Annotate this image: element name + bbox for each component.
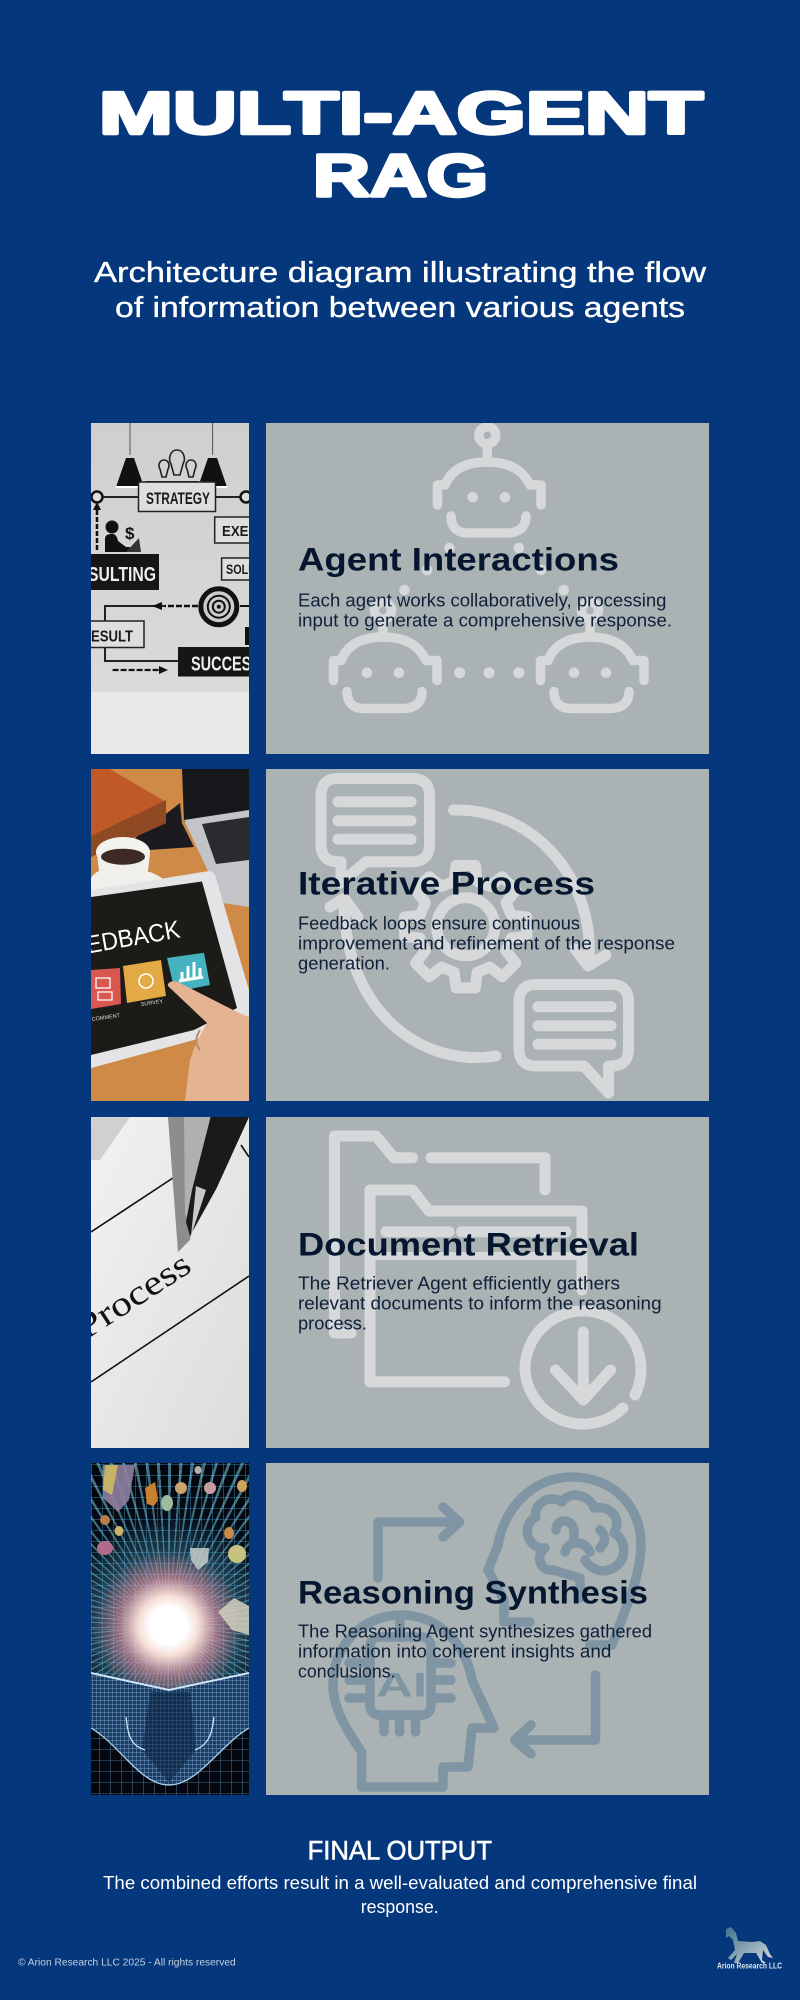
- photo: feedback tablet: COMMENT: [91, 1013, 121, 1023]
- row: iterative process: [69, 769, 709, 1101]
- photo: feedback tablet: [91, 769, 249, 1101]
- heading: final output: FINAL OUTPUT: [308, 1835, 492, 1865]
- text: document retrieval: [298, 1273, 662, 1333]
- text: document retrieval: process.: [298, 1313, 367, 1333]
- panel: agent interactions: [266, 423, 709, 754]
- logo: Arion Research horse: [717, 1927, 782, 1971]
- text: document retrieval: The Retriever Agent efficiently gathers: [298, 1273, 620, 1293]
- photo: strategy consulting wall: $: [125, 524, 135, 543]
- photo: process document and pen: [91, 1117, 249, 1448]
- text: final output description: response.: [361, 1896, 439, 1917]
- text: iterative process: generation.: [298, 953, 390, 973]
- text: agent interactions: Each agent works collaboratively, processing: [298, 591, 666, 611]
- text: agent interactions: [298, 591, 672, 631]
- row: document retrieval: [69, 1117, 709, 1448]
- photo: feedback tablet: EEDBACK: [69, 915, 182, 962]
- heading: agent interactions: Agent Interactions: [298, 542, 619, 578]
- text: final output description: [103, 1872, 697, 1917]
- text: document retrieval: relevant documents to inform the reasoning: [298, 1293, 662, 1313]
- icon: AI and human heads: [333, 1477, 641, 1787]
- icon: AI and human heads: AI: [376, 1667, 427, 1705]
- heading: iterative process: Iterative Process: [298, 865, 595, 901]
- photo: strategy consulting wall: EXEC: [222, 523, 258, 540]
- logo: Arion Research horse: Arion Research LLC: [717, 1962, 782, 1971]
- text: reasoning synthesis: conclusions.: [298, 1661, 396, 1681]
- text: iterative process: [298, 913, 675, 973]
- text: reasoning synthesis: information into coherent insights and: [298, 1641, 611, 1661]
- photo: process document and pen: Process: [69, 1244, 198, 1347]
- heading: document retrieval: Document Retrieval: [298, 1227, 639, 1263]
- title: MULTI-AGENT: [99, 80, 703, 146]
- text: iterative process: improvement and refinement of the response: [298, 933, 675, 953]
- subtitle: [94, 257, 707, 324]
- text: iterative process: Feedback loops ensure continuous: [298, 913, 580, 933]
- panel: document retrieval: [266, 1117, 709, 1448]
- photo: strategy consulting wall: SOLU: [226, 562, 256, 577]
- icon: feedback loop: [321, 778, 628, 1093]
- photo: feedback tablet: SURVEY: [140, 999, 164, 1008]
- text: reasoning synthesis: [298, 1621, 652, 1681]
- text: final output description: The combined efforts result in a well-evaluated and comprehensive final: [103, 1872, 697, 1893]
- heading: reasoning synthesis: Reasoning Synthesis: [298, 1574, 648, 1610]
- photo: strategy consulting wall: SUCCESS: [191, 654, 261, 676]
- text: agent interactions: input to generate a comprehensive response.: [298, 611, 672, 631]
- title: RAG: [313, 143, 488, 209]
- row: reasoning synthesis: [91, 1463, 709, 1795]
- text: reasoning synthesis: The Reasoning Agent synthesizes gathered: [298, 1621, 652, 1641]
- icon: folders with download: [334, 1136, 641, 1424]
- copyright: © Arion Research LLC 2025 - All rights reserved: [18, 1957, 236, 1969]
- title: [99, 80, 703, 209]
- panel: iterative process: [266, 769, 709, 1101]
- photo: strategy consulting wall: ESULT: [91, 629, 133, 646]
- photo: luminous AI burst: [91, 1463, 249, 1795]
- subtitle: of information between various agents: [115, 292, 685, 324]
- subtitle: Architecture diagram illustrating the flow: [94, 257, 707, 289]
- photo: strategy consulting wall: [91, 423, 249, 754]
- photo: strategy consulting wall: STRATEGY: [146, 489, 210, 508]
- icon: robots network: [334, 427, 644, 708]
- panel: reasoning synthesis: [266, 1463, 709, 1795]
- row: agent interactions: [85, 423, 709, 754]
- photo: strategy consulting wall: SULTING: [88, 564, 156, 586]
